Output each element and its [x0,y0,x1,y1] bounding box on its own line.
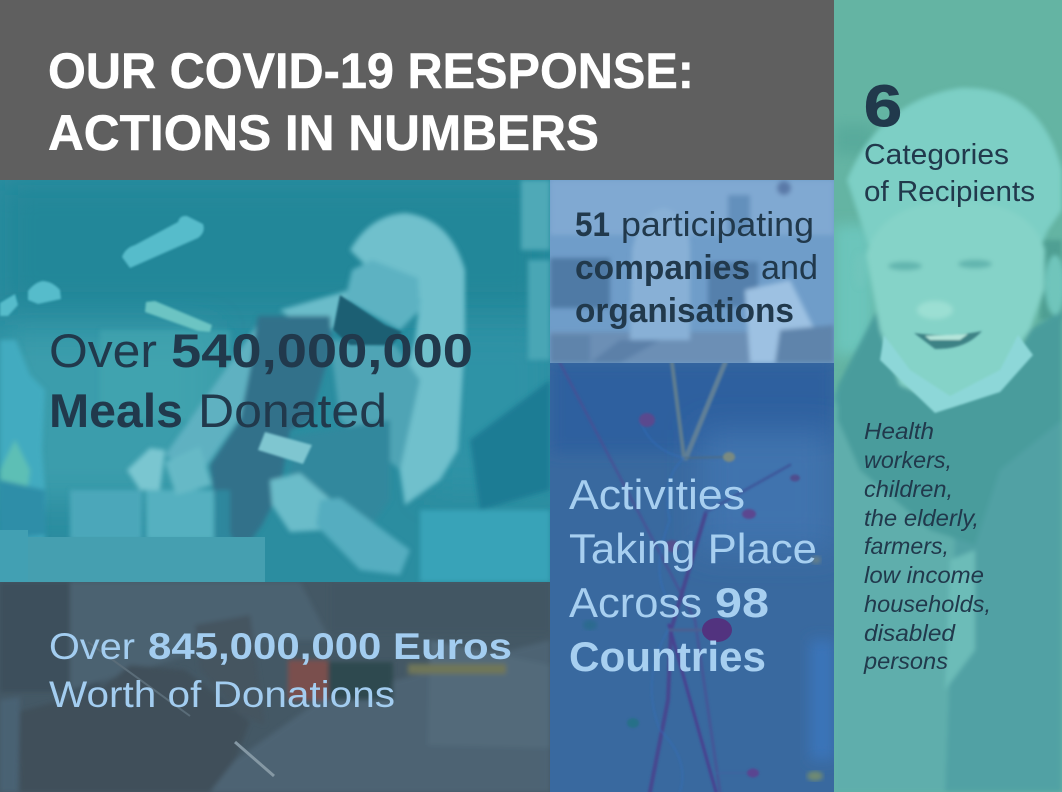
photo: volunteer woman with cans [0,180,550,582]
countries text: Across [569,579,702,626]
euros text: 845,000,000 Euros [148,626,512,667]
meals text: 540,000,000 [171,324,473,377]
recipients list [863,418,991,674]
recipients list: farmers, [864,533,949,559]
volunteer badge [258,432,312,464]
companies text: and [761,249,818,287]
euros text [49,632,510,708]
recipients list: the elderly, [864,505,979,531]
photo: hand signing document [0,582,550,792]
panel: euros donated [0,582,550,792]
euros text: Worth of Donations [49,674,395,715]
panel: categories of recipients [834,0,1062,792]
meals text: Meals [49,384,183,437]
photo: office team [550,180,834,363]
panel: meals donated [0,180,550,582]
countries text: Countries [569,633,766,680]
recipients list: workers, [864,447,952,473]
companies text: organisations [575,292,794,330]
smile [914,331,982,349]
title: ACTIONS IN NUMBERS [48,105,599,161]
photo: smiling elderly woman [834,88,1062,792]
panel: participating companies [550,180,834,363]
countries text: Activities [569,471,745,518]
categories heading: 6 [864,74,902,139]
categories heading: Categories [864,139,1009,171]
panel: countries map [550,363,834,792]
title: OUR COVID-19 RESPONSE: [48,43,694,99]
ceiling lights [0,216,212,332]
companies text: companies [575,249,750,287]
pen [88,642,190,716]
panel: title banner [0,0,834,180]
meals text [51,334,471,428]
categories heading [864,74,1035,208]
title [48,43,694,161]
recipients list: persons [863,648,949,674]
recipients list: disabled [864,620,956,646]
recipients list: Health [864,418,934,444]
companies text: participating [621,206,814,244]
companies text [575,206,818,330]
meals text: Donated [198,384,387,437]
companies text: 51 [575,206,610,244]
map pins [583,413,823,781]
face mask [333,295,402,345]
countries text: Taking Place [569,525,817,572]
categories heading: of Recipients [864,176,1035,208]
meals text: Over [49,324,157,377]
map connection lines [560,363,790,792]
euros text: Over [49,626,135,667]
countries text [569,471,817,680]
recipients list: low income [864,562,984,588]
recipients list: households, [864,591,991,617]
surgical mask [880,335,1033,413]
recipients list: children, [864,476,953,502]
cardboard boxes [0,530,265,582]
countries text: 98 [715,579,769,626]
